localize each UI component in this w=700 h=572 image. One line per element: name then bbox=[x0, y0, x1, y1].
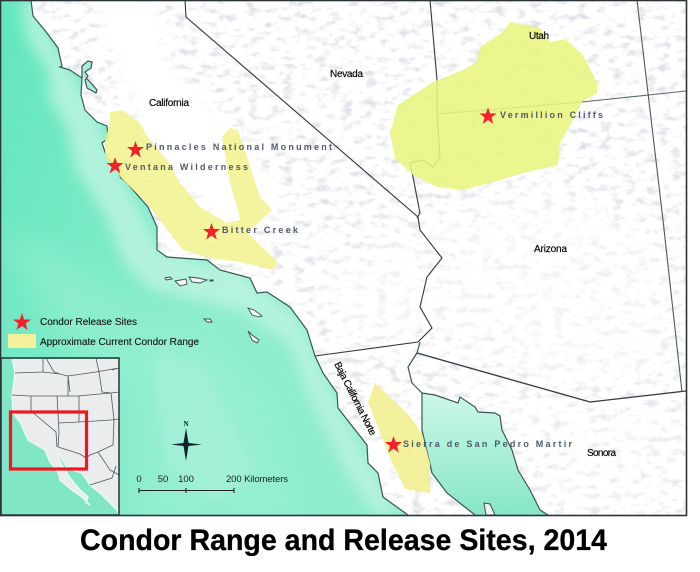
release site: Sierra de San Pedro Martir bbox=[385, 436, 572, 452]
coastline bbox=[31, 0, 408, 515]
inset state lines bbox=[12, 358, 119, 485]
scale bar: 200 Kilometers bbox=[226, 474, 288, 485]
label: Arizona: Arizona bbox=[534, 244, 567, 255]
label: Sonora: Sonora bbox=[587, 448, 616, 459]
release site: Pinnacles National Monument: Pinnacles National Monument bbox=[146, 142, 332, 152]
inset land bbox=[12, 358, 119, 515]
label: Utah: Utah bbox=[529, 31, 549, 42]
condor range: California bbox=[105, 110, 278, 270]
release site: Sierra de San Pedro Martir: Sierra de San Pedro Martir bbox=[403, 439, 572, 449]
legend text: range: Approximate Current Condor Range bbox=[40, 337, 199, 348]
legend text: release sites: Condor Release Sites bbox=[40, 317, 137, 328]
channel islands bbox=[165, 277, 262, 343]
San Francisco bay bbox=[82, 61, 97, 93]
ocean bbox=[1, 1, 407, 515]
scale bar: 0 bbox=[136, 474, 142, 485]
legend bbox=[8, 313, 199, 348]
locator inset map bbox=[1, 358, 119, 515]
release site: Vermillion Cliffs bbox=[480, 108, 603, 124]
gulf of California bbox=[422, 393, 548, 515]
label: Baja California Norte: Baja California Norte bbox=[331, 360, 378, 438]
release site: Pinnacles National Monument bbox=[127, 141, 332, 158]
release site: Ventana Wilderness: Ventana Wilderness bbox=[125, 162, 248, 172]
inset frame bbox=[1, 358, 119, 515]
release site: Bitter Creek: Bitter Creek bbox=[222, 225, 299, 235]
state borders bbox=[185, 0, 686, 402]
island in gulf bbox=[484, 503, 495, 515]
legend swatch: range bbox=[8, 334, 36, 348]
north arrow: N bbox=[183, 420, 189, 428]
condor range: Baja California bbox=[368, 383, 430, 493]
title: Condor Range and Release Sites, 2014 bbox=[80, 524, 607, 557]
release site: Vermillion Cliffs: Vermillion Cliffs bbox=[500, 110, 603, 120]
place labels bbox=[149, 31, 616, 459]
scale bar bbox=[136, 474, 288, 493]
release site: Bitter Creek bbox=[203, 223, 299, 240]
condor range: Utah and Arizona bbox=[390, 22, 597, 190]
label: California: California bbox=[149, 98, 189, 109]
label: Nevada: Nevada bbox=[330, 69, 363, 80]
legend star bbox=[13, 313, 31, 330]
scale bar: 50 bbox=[158, 474, 168, 485]
scale bar: 100 bbox=[178, 474, 194, 485]
inset extent rectangle bbox=[10, 412, 86, 469]
north arrow bbox=[171, 420, 202, 461]
release site: Ventana Wilderness bbox=[106, 157, 248, 174]
gulf coastline bbox=[408, 342, 548, 515]
